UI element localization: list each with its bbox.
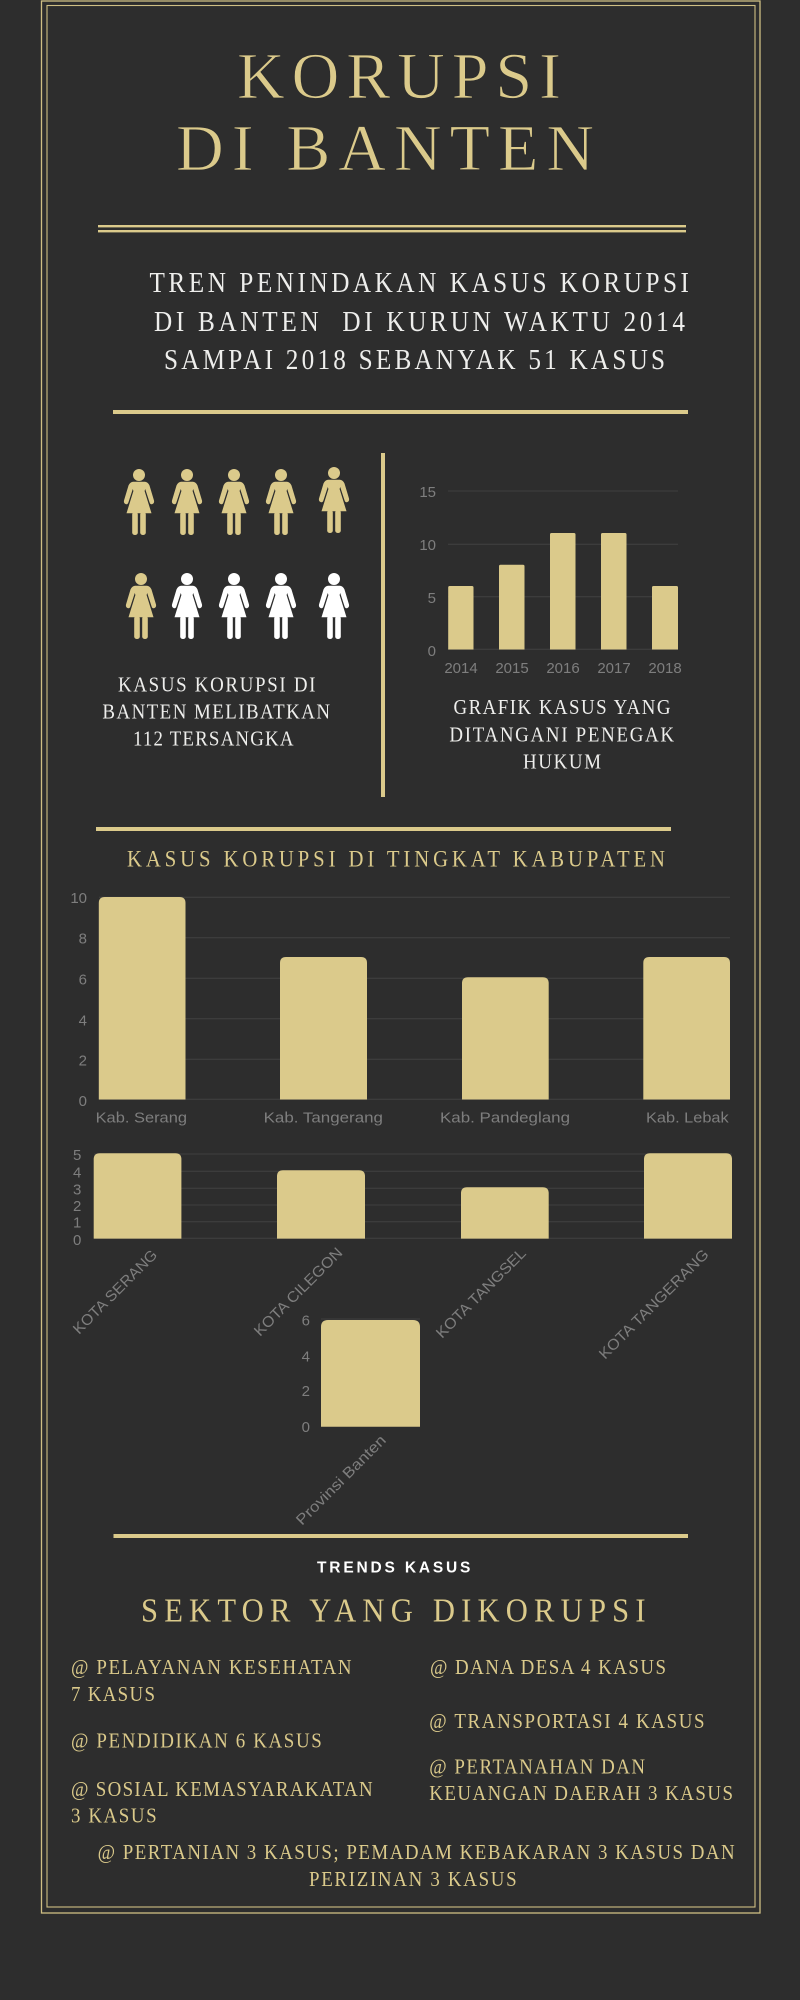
bar chart: cities: 0 [73,1232,81,1249]
list: sectors footer [98,1841,735,1891]
bar chart: cities: KOTA CILEGON [251,1244,346,1340]
caption: yearly chart [449,696,675,774]
title: KORUPSI [237,40,561,113]
intro text: TREN PENINDAKAN KASUS KORUPSI [150,267,689,298]
bar chart: cases per year: 15 [419,484,436,501]
bar chart: cities: KOTA TANGERANG [596,1246,712,1363]
list: sectors left column: @ PENDIDIKAN 6 KASUS [71,1729,322,1753]
list: sectors right column [429,1656,733,1805]
bar chart: cities: 3 [73,1182,81,1198]
icon: person white 2 [219,573,249,639]
icon: person white 1 [172,573,202,639]
bar chart: regencies: 6 [79,971,87,988]
caption: suspects [102,674,330,751]
bar chart: cities: KOTA TANGSEL [433,1245,530,1342]
bar chart: regencies: 0 [79,1093,87,1110]
intro text [150,267,689,375]
icon: person gold 5 [319,467,349,533]
icon: person gold 3 [219,469,249,535]
bar chart: province [293,1312,420,1529]
bar chart: regencies: Kab. Serang [96,1110,187,1126]
icon: person gold 6 [126,573,156,639]
bar chart: cases per year: 0 [428,643,436,660]
bar chart: cases per year [419,484,682,677]
list: sectors left column: 7 KASUS [71,1683,155,1706]
list: sectors right column: @ TRANSPORTASI 4 KASUS [429,1710,705,1733]
bar chart: cities [70,1147,732,1363]
bar chart: cities: 5 [73,1147,81,1164]
bar chart: province: 6 [302,1312,310,1330]
list: sectors right column: @ DANA DESA 4 KASUS [430,1656,666,1679]
caption: yearly chart: DITANGANI PENEGAK [449,723,675,747]
double rule under title [98,225,686,232]
bar chart: regencies: Kab. Tangerang [264,1110,383,1126]
list: sectors left column [71,1656,373,1828]
vertical divider [381,453,385,797]
list: sectors left column: 3 KASUS [71,1805,157,1828]
bar chart: cases per year: 2016 [546,660,580,677]
bar chart: regencies [70,890,730,1126]
icon: person white 4 [319,573,349,639]
list: sectors right column: KEUANGAN DAERAH 3 KASUS [429,1782,733,1805]
label: trends: TRENDS KASUS [317,1560,470,1577]
icon: person gold 4 [266,469,296,535]
bar chart: regencies: 2 [79,1052,87,1069]
bar chart: cases per year: 2017 [597,660,631,677]
bar chart: regencies: Kab. Lebak [646,1110,729,1126]
bar chart: cases per year: 5 [428,590,436,607]
icon: person white 3 [266,573,296,639]
icon: person gold 1 [124,469,154,535]
heading: sectors: SEKTOR YANG DIKORUPSI [141,1591,646,1629]
list: sectors left column: @ SOSIAL KEMASYARAKATAN [71,1778,373,1801]
bar chart: cities: 1 [73,1214,81,1232]
rule above sectors [114,1534,688,1538]
icon: person gold 2 [172,469,202,535]
caption: yearly chart: HUKUM [523,750,601,774]
bar chart: regencies: 8 [79,930,87,947]
rule above regency section [96,827,671,831]
bar chart: regencies: Kab. Pandeglang [440,1110,570,1126]
list: sectors footer: @ PERTANIAN 3 KASUS; PEMADAM KEBAKARAN 3 KASUS DAN [98,1841,735,1864]
bar chart: cases per year: 2014 [444,660,478,677]
bar chart: cities: KOTA SERANG [70,1247,161,1338]
bar chart: cities: 2 [73,1198,81,1215]
title: DI BANTEN [176,112,594,185]
caption: suspects: BANTEN MELIBATKAN [102,701,330,724]
list: sectors footer: PERIZINAN 3 KASUS [309,1868,517,1891]
intro text: SAMPAI 2018 SEBANYAK 51 KASUS [164,344,665,375]
list: sectors right column: @ PERTANAHAN DAN [429,1755,645,1779]
list: sectors left column: @ PELAYANAN KESEHATAN [71,1656,352,1679]
bar chart: cities: 4 [73,1164,81,1182]
bar chart: cases per year: 2018 [648,660,682,677]
panel: people pictogram, 112 suspects [124,467,349,639]
caption: suspects: KASUS KORUPSI DI [118,674,315,697]
bar chart: province: 4 [302,1348,310,1366]
title [176,40,594,185]
rule under intro [113,410,688,414]
bar chart: regencies: 10 [70,890,87,907]
bar chart: cases per year: 2015 [495,660,529,677]
caption: yearly chart: GRAFIK KASUS YANG [454,696,670,719]
caption: suspects: 112 TERSANGKA [133,728,294,751]
intro text: DI BANTEN DI KURUN WAKTU 2014 [154,306,685,337]
bar chart: province: 2 [302,1383,310,1400]
heading: regency level: KASUS KORUPSI DI TINGKAT KABUPATEN [127,847,665,872]
bar chart: province: 0 [302,1419,310,1436]
bar chart: province: Provinsi Banten [293,1432,390,1529]
bar chart: cases per year: 10 [419,537,436,554]
bar chart: regencies: 4 [79,1012,87,1029]
